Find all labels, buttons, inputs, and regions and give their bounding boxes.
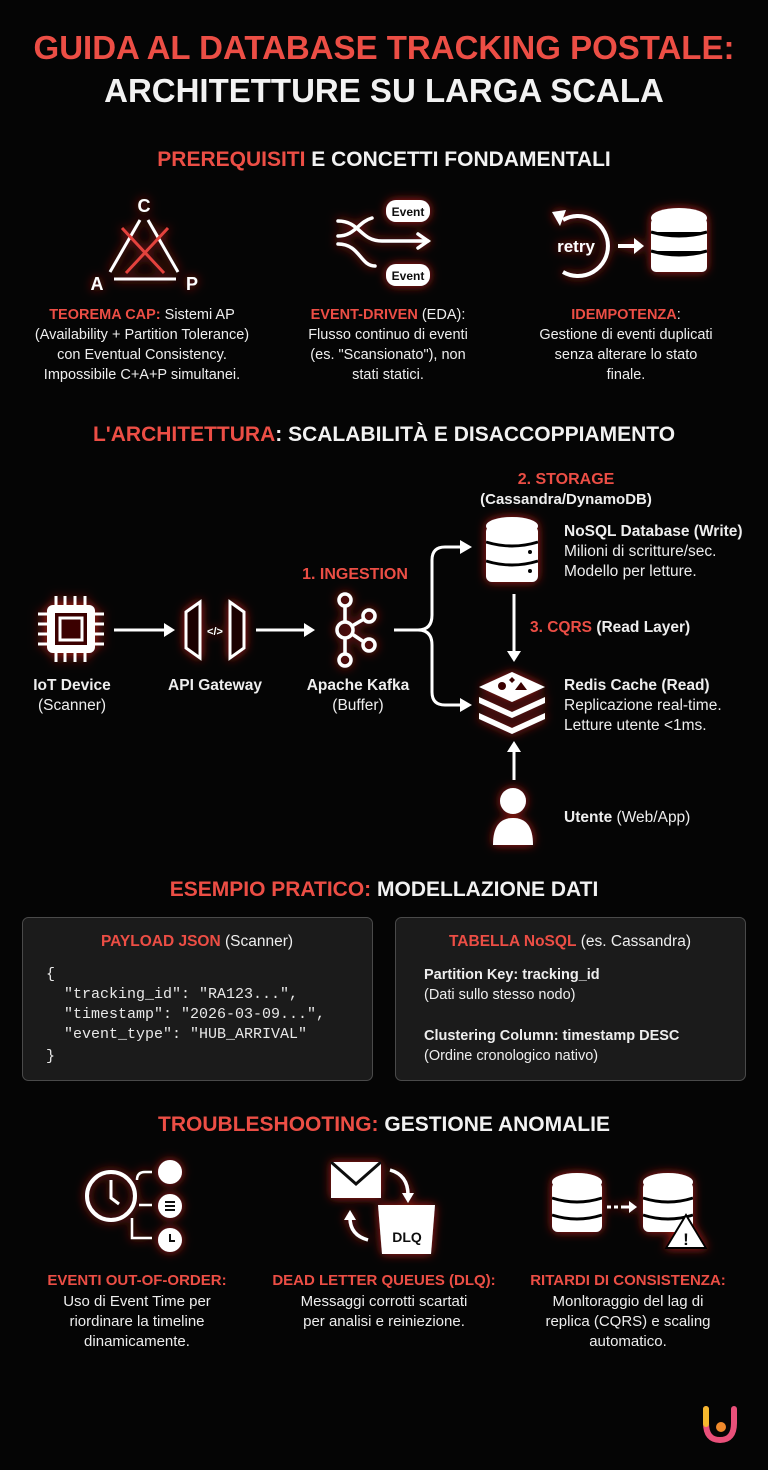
text: NoSQL — [564, 523, 743, 580]
text block: out-of-order: riordinare la timeline — [69, 1313, 205, 1330]
labels: row — [33, 677, 410, 714]
labels: row: (Scanner) — [38, 697, 106, 714]
panel: payload json: } — [46, 1048, 55, 1065]
text block: EDA — [308, 307, 468, 383]
title — [34, 29, 734, 109]
arrow: up — [507, 741, 521, 780]
text block: out-of-order: dinamicamente. — [84, 1333, 190, 1350]
text: NoSQL: Milioni di scritture/sec. — [564, 543, 716, 560]
text block: DLQ — [272, 1272, 496, 1330]
text block: out-of-order — [47, 1272, 227, 1350]
text: redis: Replicazione real-time. — [564, 697, 722, 714]
icon: CAP triangle: P — [186, 274, 198, 294]
arrow: CQRS — [507, 594, 521, 662]
icon: CAP triangle: A — [90, 274, 104, 294]
icon: retry to database — [552, 208, 707, 276]
label: ingestion: 1. INGESTION — [302, 566, 408, 583]
arrow — [256, 628, 306, 632]
icon: API gateway — [186, 602, 244, 658]
icon: CAP triangle — [90, 196, 198, 294]
icon: user — [493, 788, 533, 845]
icon: event-driven — [338, 200, 430, 286]
text block: out-of-order: EVENTI OUT-OF-ORDER: — [47, 1272, 227, 1289]
icon: IoT chip — [38, 596, 104, 662]
text block: idempotenza: IDEMPOTENZA: — [571, 307, 681, 323]
architecture diagram: 3. CQRS (Read Layer) — [530, 619, 690, 636]
text block: idempotenza: senza alterare lo stato — [555, 347, 697, 363]
arrow — [114, 628, 166, 632]
text block: consistenza: replica (CQRS) e scaling — [545, 1313, 711, 1330]
icon: event-driven: Event — [392, 205, 424, 219]
text: NoSQL: NoSQL Database (Write) — [564, 523, 743, 540]
heading: troubleshooting: TROUBLESHOOTING: GESTIONE ANOMALIE — [158, 1113, 610, 1136]
labels: row: Apache Kafka — [307, 677, 410, 694]
panel: tabella nosql: Clustering Column: timestamp DESC — [424, 1028, 680, 1044]
panel: tabella nosql: Partition Key: tracking_id — [424, 967, 600, 983]
text block: EDA: Flusso continuo di eventi — [308, 327, 468, 343]
icon: CAP triangle: C — [138, 196, 150, 216]
icon: event-driven: Event — [392, 269, 424, 283]
text block: CAP: (Availability + Partition Tolerance) — [35, 327, 249, 343]
icon: API gateway: </> — [207, 626, 223, 638]
text block: consistenza — [530, 1272, 726, 1350]
text block: idempotenza: Gestione di eventi duplicati — [539, 327, 713, 343]
text: NoSQL: Modello per letture. — [564, 563, 697, 580]
icon: DLQ — [331, 1162, 435, 1254]
text block: DLQ: per analisi e reiniezione. — [303, 1313, 465, 1330]
panel: tabella nosql — [396, 918, 746, 1080]
text block: EDA: (es. "Scansionato"), non — [310, 347, 466, 363]
text: utente: Utente (Web/App) — [564, 809, 690, 826]
arrow: fork — [394, 547, 462, 705]
icon: clock events — [87, 1160, 182, 1252]
text: redis — [564, 677, 722, 734]
labels: row: (Buffer) — [332, 697, 384, 714]
text block: consistenza: automatico. — [589, 1333, 667, 1350]
text block: idempotenza — [539, 307, 713, 383]
text block: out-of-order: Uso di Event Time per — [63, 1293, 211, 1310]
text block: consistenza: RITARDI DI CONSISTENZA: — [530, 1272, 726, 1289]
text block: CAP: TEOREMA CAP: Sistemi AP — [49, 307, 235, 323]
text block: EDA: EVENT-DRIVEN (EDA): — [311, 307, 465, 323]
icon: retry to database: retry — [557, 237, 595, 256]
panel: tabella nosql: (Dati sullo stesso nodo) — [424, 987, 576, 1003]
heading: architettura: L'ARCHITETTURA: SCALABILITÀ E DISACCOPPIAMENTO — [93, 423, 675, 446]
panel: tabella nosql: (Ordine cronologico nativo) — [424, 1048, 598, 1064]
text block: DLQ: Messaggi corrotti scartati — [301, 1293, 467, 1310]
panel: payload json: "event_type": "HUB_ARRIVAL" — [46, 1026, 307, 1043]
panel: payload json: "timestamp": "2026-03-09...", — [46, 1006, 325, 1023]
labels: row: API Gateway — [168, 677, 262, 694]
panel: payload json: PAYLOAD JSON (Scanner) — [101, 933, 293, 950]
icon: kafka — [337, 594, 375, 666]
labels: row: IoT Device — [33, 677, 111, 694]
heading: esempio pratico: ESEMPIO PRATICO: MODELLAZIONE DATI — [170, 878, 598, 901]
panel: payload json: { — [46, 966, 55, 983]
panel: payload json — [22, 918, 372, 1080]
storage label: 2. STORAGE — [518, 471, 615, 488]
panel: payload json: "tracking_id": "RA123...", — [46, 986, 298, 1003]
icon: db lag: ! — [683, 1230, 689, 1249]
text block: idempotenza: finale. — [607, 367, 645, 383]
logo — [706, 1409, 734, 1440]
text: redis: Redis Cache (Read) — [564, 677, 710, 694]
icon: DLQ: DLQ — [392, 1229, 422, 1245]
title: GUIDA AL DATABASE TRACKING POSTALE: — [34, 29, 734, 66]
architecture diagram: (Cassandra/DynamoDB) — [480, 491, 652, 508]
title: ARCHITETTURE SU LARGA SCALA — [104, 72, 664, 109]
text: redis: Letture utente <1ms. — [564, 717, 707, 734]
text block: DLQ: DEAD LETTER QUEUES (DLQ): — [272, 1272, 496, 1289]
heading: prerequisiti: PREREQUISITI E CONCETTI FONDAMENTALI — [157, 148, 611, 171]
text block: consistenza: Monltoraggio del lag di — [553, 1293, 703, 1310]
text block: EDA: stati statici. — [352, 367, 424, 383]
icon: NoSQL db — [486, 517, 538, 582]
text block: CAP — [35, 307, 249, 383]
icon: db lag — [552, 1173, 706, 1249]
panel: tabella nosql: TABELLA NoSQL (es. Cassandra) — [449, 933, 691, 950]
icon: redis — [479, 672, 545, 734]
architecture diagram — [33, 471, 743, 845]
text block: CAP: Impossibile C+A+P simultanei. — [44, 367, 240, 383]
text block: CAP: con Eventual Consistency. — [57, 347, 227, 363]
